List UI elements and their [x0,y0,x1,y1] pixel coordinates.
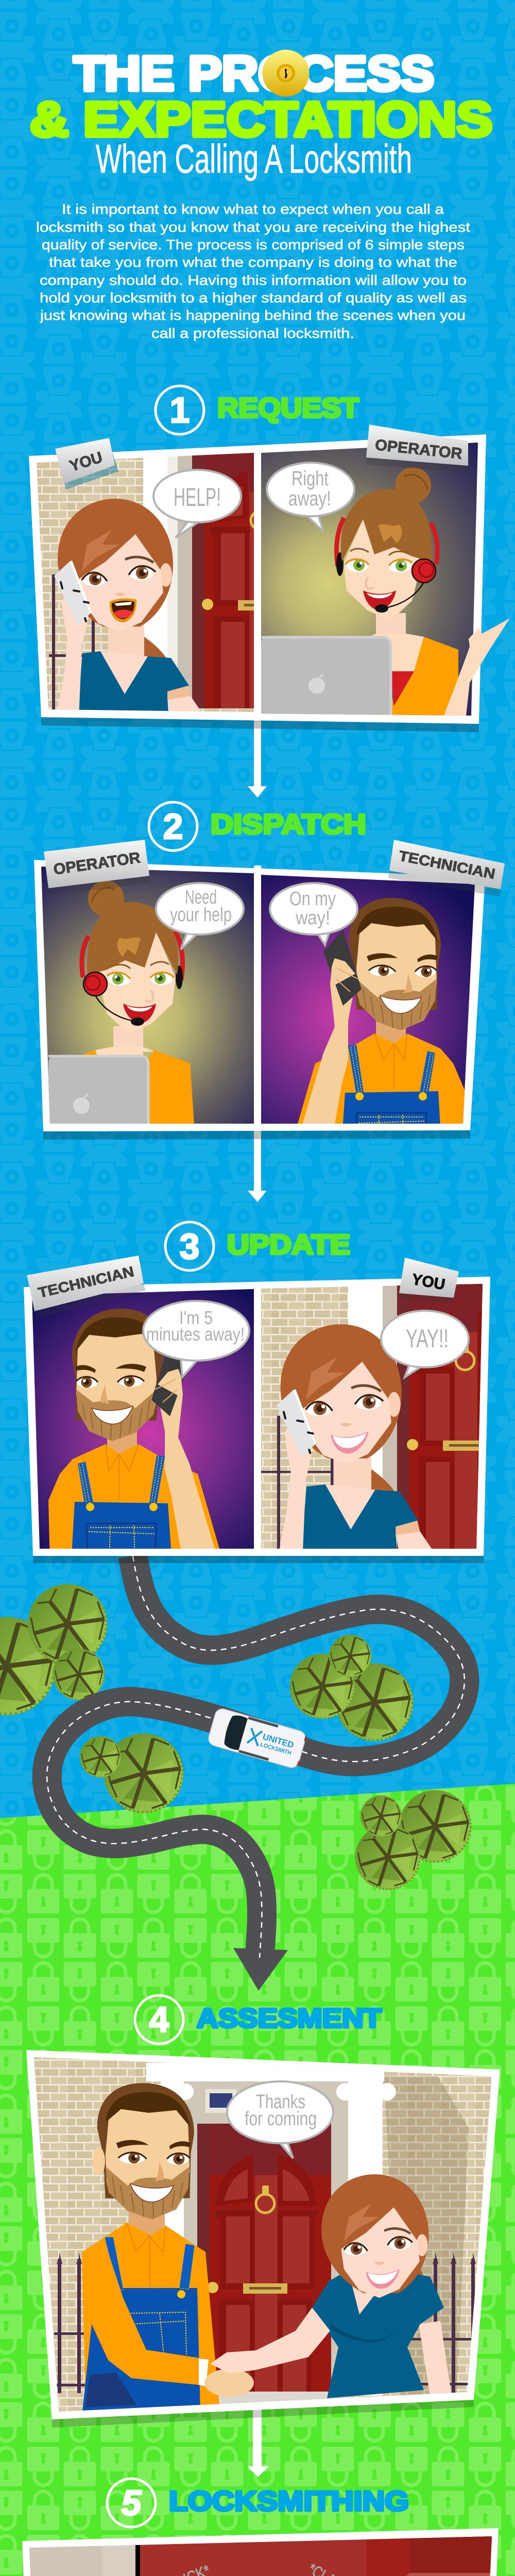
label: operator: OPERATOR [53,849,142,878]
speech bubble: need your help: your help [170,904,232,926]
step 1 heading: Request: 1 [170,390,190,430]
step 2 heading: Dispatch [149,802,366,851]
intro paragraph: company should do. Having this information will allow you to [40,273,467,288]
intro paragraph: just knowing what is happening behind the scenes when you [40,308,466,323]
intro paragraph [36,201,471,341]
label: technician [388,840,505,896]
trees: centre right cluster [290,1635,413,1741]
step 3 heading: Update: 3 [180,1226,199,1266]
label: you [55,438,118,489]
scene: technician updating [32,1289,254,1549]
speech bubble: need your help: Need [185,887,217,908]
step 4 heading: Assesment [135,1995,382,2044]
label: you: YOU [67,449,105,475]
title line: and Expectations: & EXPECTATIONS [30,92,492,147]
speech bubble: on my way: way! [295,907,330,929]
arrow: step 4 to step 5 [247,2409,269,2477]
icon: gold lock in title [263,49,309,97]
scene: operator at laptop [258,438,484,726]
intro paragraph: quality of service. The process is comprised of 6 simple steps [42,237,465,252]
speech bubble: yay: YAY!! [406,1324,449,1353]
step 5 heading: Locksmithing: LOCKSMITHING [169,2486,409,2517]
title line: The Process: THE PROCESS [74,46,434,101]
scene: you calling from door [37,453,254,712]
trees: lower left cluster [80,1734,183,1813]
step 4 heading: Assesment: 4 [149,1999,169,2040]
label: technician [27,1256,145,1318]
intro paragraph: hold your locksmith to a higher standard of quality as well as [40,290,467,306]
road arrow: winding road from step 3 to step 4 [47,1556,465,1991]
intro paragraph: that take you from what the company is doing to what the [49,255,457,270]
step 5 heading: Locksmithing [107,2479,409,2527]
speech bubble: right away [267,463,354,532]
scene: door and lock [29,2536,492,2576]
step 5 heading: Locksmithing: 5 [122,2483,142,2523]
arrow: step 1 to step 2 [248,716,267,798]
panel: step 3 photo frame [24,1256,515,1565]
background: green padlock pattern [0,1784,515,2576]
icon: locksmith van: UNITED [262,1732,295,1750]
speech bubble: on my way [270,883,357,945]
speech bubble: minutes away: minutes away! [146,1324,245,1345]
speech bubble: yay [381,1311,469,1377]
technician [82,2083,220,2411]
label: operator [44,840,150,895]
speech bubble: minutes away [143,1301,249,1377]
speech bubble: help: HELP! [174,483,221,512]
label: you: YOU [410,1271,447,1293]
speech bubble: thanks for coming: for coming [245,2108,317,2130]
speech bubble: thanks for coming: Thanks [256,2091,305,2113]
handshake [204,2308,330,2397]
speech bubble: thanks for coming [227,2081,333,2158]
step 3 heading: Update: UPDATE [227,1229,350,1260]
step 1 heading: Request [156,386,359,434]
speech bubble: on my way: On my [289,888,336,910]
title [30,46,492,181]
icon: locksmith van: LOCKSMITH [260,1742,292,1756]
label: operator [366,425,468,473]
intro paragraph: It is important to know what to expect when you call a [62,201,444,217]
speech bubble: right away: Right [291,467,329,490]
step 3 heading: Update [165,1222,350,1270]
speech bubble: right away: away! [288,487,331,510]
panel: step 1 photo frame [29,425,510,732]
speech bubble: minutes away: I'm 5 [179,1307,213,1328]
speech bubble: need your help [156,883,244,950]
icon: locksmith van [207,1707,308,1770]
woman [312,2174,452,2398]
label: operator: OPERATOR [374,436,463,463]
label: you [399,1258,459,1303]
scene: handshake at door [31,2053,494,2422]
scene: operator dispatching [41,867,254,1124]
panel: step 5 photo frame, lock picking [22,2528,499,2576]
intro paragraph: locksmith so that you know that you are receiving the highest [36,219,471,235]
operator hand [444,618,510,716]
trees: upper left cluster [0,1584,107,1715]
scene: technician on phone [261,875,475,1124]
step 2 heading: Dispatch: DISPATCH [211,809,366,840]
panel: step 4 photo frame [26,2050,500,2428]
trees: lower right cluster [355,1790,471,1890]
scene: you happy at door [261,1284,483,1549]
label: technician: TECHNICIAN [398,848,496,882]
background: blue telephone pattern [0,0,515,1855]
intro paragraph: call a professional locksmith. [151,326,354,341]
arrow: step 2 to step 3 [248,1128,267,1202]
label: technician: TECHNICIAN [37,1263,135,1301]
step 1 heading: Request: REQUEST [217,393,359,423]
step 2 heading: Dispatch: 2 [163,806,183,846]
step 4 heading: Assesment: ASSESMENT [197,2004,382,2033]
speech bubble: help [153,470,241,538]
panel: step 2 photo frame [34,840,505,1154]
